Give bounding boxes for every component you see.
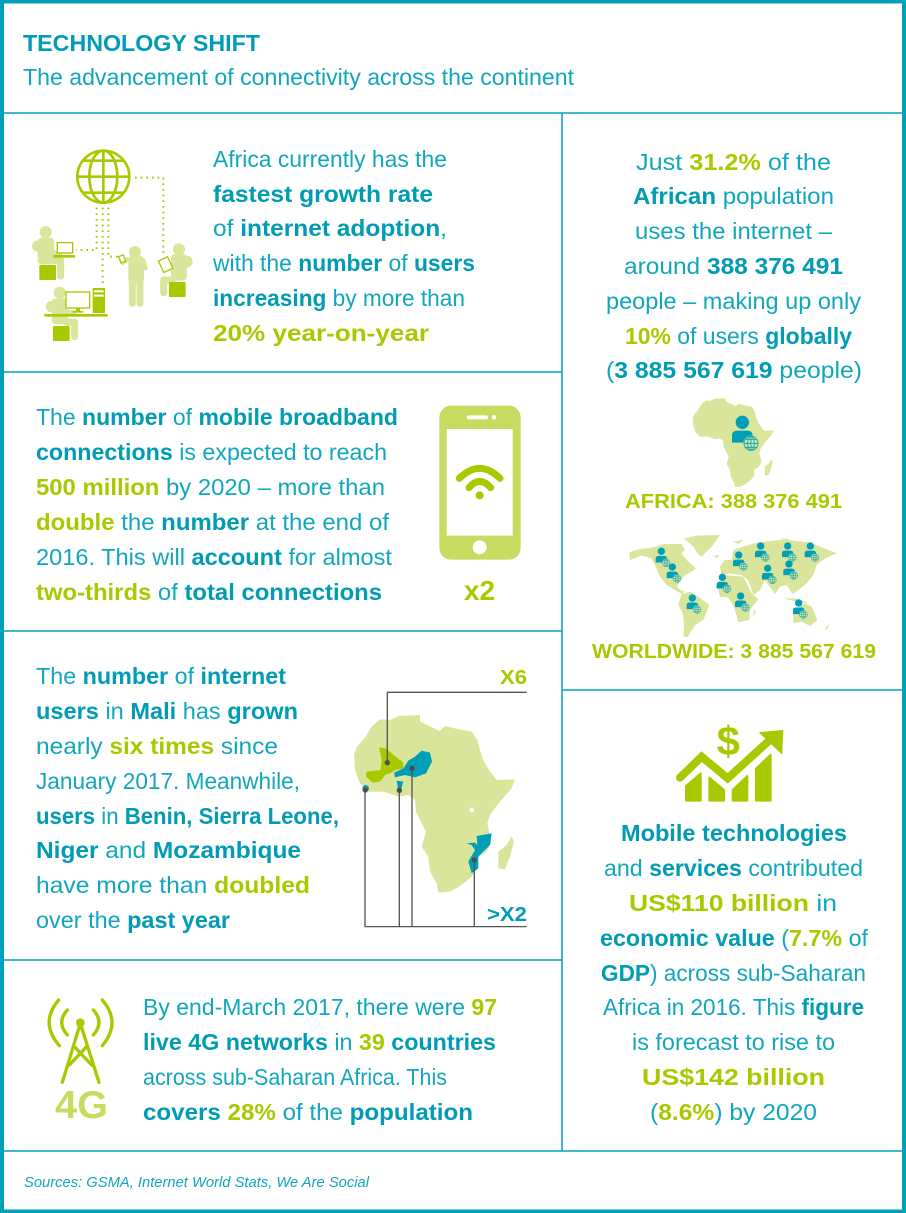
text: mobile broadband: connections is expected to reach [36, 439, 387, 465]
icon: rising chart with dollar: $ [717, 718, 740, 764]
text: mobile broadband: two-thirds of total connections [36, 579, 382, 605]
label >X2: >X2 [487, 904, 527, 926]
text: share of users: 10% of users globally [625, 323, 852, 349]
panel: internet adoption [32, 146, 475, 346]
text: internet users growth: users in Benin, Sierra Leone, [36, 803, 339, 829]
text: 4G networks [143, 994, 497, 1125]
text: mobile broadband: 500 million by 2020 – more than [36, 474, 385, 500]
text: internet users growth: The number of internet [36, 663, 286, 689]
text: mobile broadband: double the number at the end of [36, 509, 390, 535]
icon: people connected to globe [32, 151, 193, 341]
text: 4G networks: across sub-Saharan Africa. This [143, 1064, 447, 1090]
text: economic value: Africa in 2016. This figure [603, 994, 864, 1020]
text: share of users: Just 31.2% of the [636, 149, 831, 175]
text: share of users: uses the internet – [635, 218, 832, 244]
label X6: X6 [500, 667, 527, 689]
panel: mobile broadband [36, 404, 521, 606]
text: share of users: people – making up only [606, 288, 862, 314]
icon: smartphone with wifi [439, 406, 521, 560]
label 4G: 4G [55, 1084, 108, 1127]
label: worldwide users: WORLDWIDE: 3 885 567 619 [592, 641, 876, 663]
text: share of users: (3 885 567 619 people) [606, 357, 862, 383]
text: internet growth: of internet adoption , [213, 215, 447, 241]
text: internet users growth: January 2017. Meanwhile, [36, 768, 300, 794]
map: world with user icons [629, 535, 837, 637]
text: economic value [600, 820, 869, 1125]
panel: internet users share [592, 149, 876, 663]
text: internet growth: fastest growth rate [213, 181, 433, 207]
title: TECHNOLOGY SHIFT [23, 30, 260, 56]
text: internet growth: 20% year-on-year [213, 320, 429, 346]
text: share of users: African population [633, 183, 834, 209]
sources: Sources: GSMA, Internet World Stats, We Are Social [24, 1175, 370, 1191]
text: 4G networks: covers 28% of the population [143, 1099, 473, 1125]
text: economic value: Mobile technologies [621, 820, 847, 846]
text: internet users growth [36, 663, 339, 933]
text: internet users growth: have more than doubled [36, 872, 310, 898]
icon: rising chart with dollar [680, 718, 783, 801]
map: Africa with user icon [693, 398, 773, 487]
text: mobile broadband: 2016. This will account for almost [36, 544, 393, 570]
panel: 4G networks [49, 994, 497, 1127]
text: economic value: is forecast to rise to [632, 1029, 835, 1055]
text: economic value: US$142 billion [642, 1064, 825, 1090]
panel: economic value [600, 718, 869, 1125]
header [23, 30, 575, 90]
text: mobile broadband [36, 404, 398, 605]
text: internet users growth: over the past year [36, 907, 230, 933]
text: 4G networks: By end-March 2017, there were 97 [143, 994, 497, 1020]
map: Africa with highlighted countries [354, 692, 527, 927]
text: economic value: and services contributed [604, 855, 863, 881]
text: internet growth [212, 146, 475, 346]
icon: 4G tower [49, 1000, 112, 1082]
text: internet growth: Africa currently has the [213, 146, 447, 172]
subtitle: The advancement of connectivity across the continent [23, 64, 575, 90]
text: internet users growth: Niger and Mozambique [36, 837, 301, 863]
text: economic value: (8.6%) by 2020 [650, 1099, 817, 1125]
text: mobile broadband: The number of mobile broadband [36, 404, 398, 430]
text: economic value: US$110 billion in [629, 890, 837, 916]
text: 4G networks: live 4G networks in 39 countries [143, 1029, 496, 1055]
label: Africa users: AFRICA: 388 376 491 [625, 491, 842, 513]
text: economic value: economic value (7.7% of [600, 925, 869, 951]
text: share of users: around 388 376 491 [624, 253, 843, 279]
multiplier x2: x2 [464, 575, 495, 606]
text: share of users [606, 149, 862, 383]
text: internet users growth: nearly six times since [36, 733, 278, 759]
text: internet growth: with the number of users [212, 250, 475, 276]
text: internet growth: increasing by more than [213, 285, 465, 311]
text: internet users growth: users in Mali has grown [36, 698, 298, 724]
panel: Mali and others [36, 663, 527, 933]
text: economic value: GDP) across sub-Saharan [601, 960, 866, 986]
